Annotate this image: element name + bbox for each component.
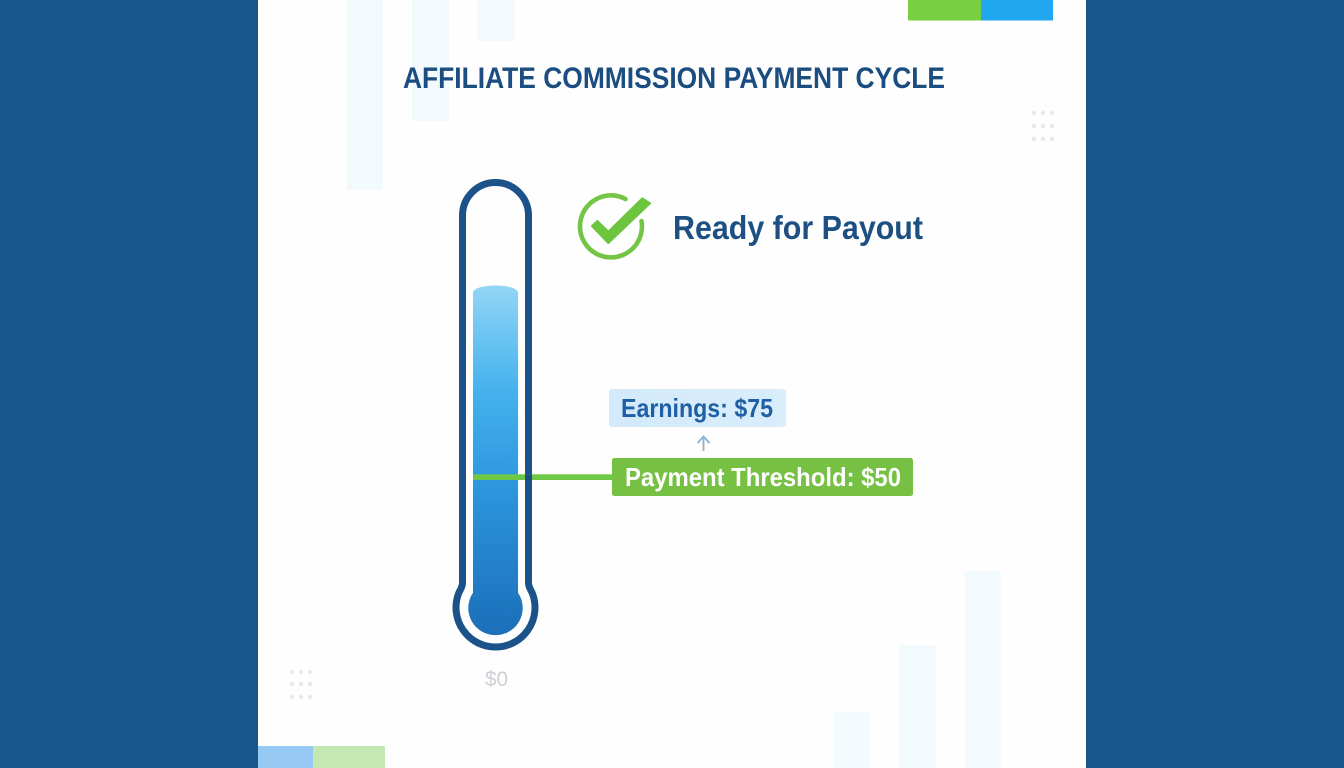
thermometer liquid fill (468, 286, 523, 635)
arrow: threshold up to earnings (698, 436, 710, 451)
thermometer glass outline (456, 182, 535, 647)
earnings callout: Earnings: $75 (621, 393, 773, 423)
threshold marker line (473, 474, 613, 480)
dot grid top right (1032, 111, 1054, 141)
status label: Ready for Payout (673, 209, 923, 246)
zero scale label: $0 (485, 668, 508, 691)
threshold callout: Payment Threshold: $50 (625, 462, 901, 492)
icon: green check in circle (580, 195, 650, 257)
title: AFFILIATE COMMISSION PAYMENT CYCLE (403, 62, 945, 95)
panel: white page (258, 0, 1086, 768)
corner accent top right (908, 0, 1053, 20)
dot grid bottom left (290, 670, 312, 699)
thermometer (456, 182, 535, 647)
corner accent bottom left (258, 746, 385, 768)
decorative pale bars top left (347, 0, 514, 190)
decorative pale bars bottom right (833, 571, 1001, 768)
